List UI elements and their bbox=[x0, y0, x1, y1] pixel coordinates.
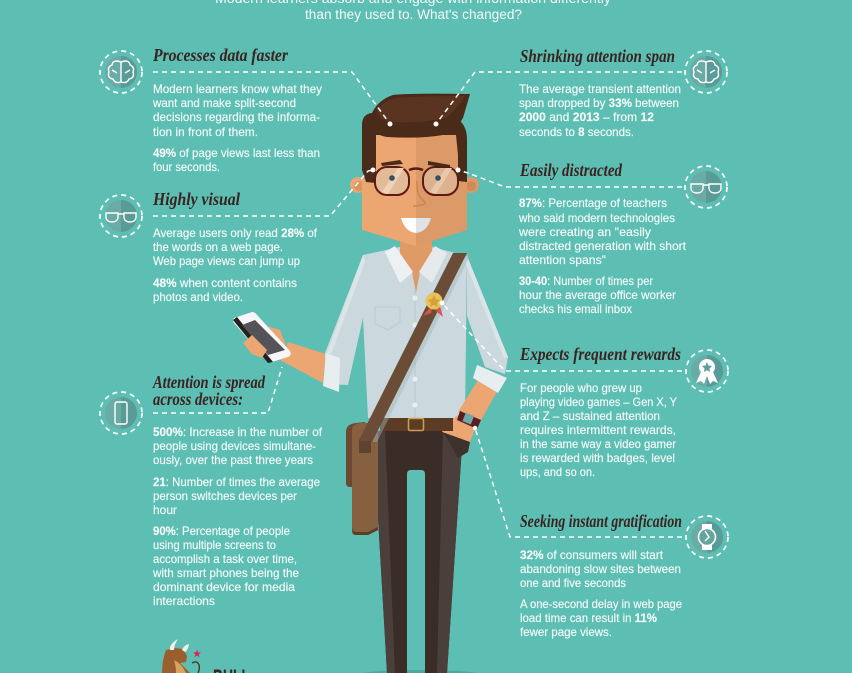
body text: 500%: Increase in the number of bbox=[153, 425, 323, 439]
body text: ups, and so on. bbox=[520, 465, 595, 479]
icon: watch bbox=[686, 516, 728, 558]
right forearm and hand bbox=[442, 380, 498, 458]
heading: Expects frequent rewards bbox=[519, 344, 681, 364]
body text bbox=[152, 82, 322, 174]
body text: 87%: Percentage of teachers bbox=[519, 196, 667, 210]
body text: span dropped by 33% between bbox=[519, 96, 679, 110]
body text: 49% of page views last less than bbox=[153, 146, 320, 160]
left arm holding phone bbox=[280, 342, 326, 383]
body text: photos and video. bbox=[153, 290, 243, 304]
heading: Processes data faster bbox=[152, 45, 289, 65]
body text bbox=[519, 82, 681, 139]
body text: who said modern technologies bbox=[518, 211, 675, 225]
body text: 90%: Percentage of people bbox=[153, 524, 290, 538]
medal bbox=[423, 292, 443, 317]
body text: Average users only read 28% of bbox=[153, 226, 318, 240]
intro text: than they used to. What's changed? bbox=[305, 7, 522, 22]
body text: 32% of consumers will start bbox=[520, 548, 664, 562]
body text: accomplish a task over time, bbox=[153, 552, 297, 566]
heading: Easily distracted bbox=[519, 160, 623, 180]
body text: The average transient attention bbox=[519, 82, 681, 96]
body text: attention spans" bbox=[519, 253, 606, 267]
body text: one and five seconds bbox=[520, 576, 626, 590]
collar bbox=[385, 246, 447, 283]
panel: highly visual bbox=[152, 189, 318, 304]
body text: 21: Number of times the average bbox=[153, 475, 320, 489]
icon: award bbox=[686, 350, 728, 392]
body text: using multiple screens to bbox=[153, 538, 276, 552]
ears bbox=[350, 177, 479, 193]
logo: bull bbox=[162, 639, 250, 673]
icon: brain right bbox=[685, 51, 727, 93]
panel: processes data faster bbox=[152, 45, 322, 174]
body text bbox=[518, 196, 687, 316]
body text bbox=[520, 381, 677, 479]
body text: Modern learners know what they bbox=[153, 82, 322, 96]
trousers bbox=[373, 431, 463, 673]
body text: people using devices simultane- bbox=[153, 439, 316, 453]
glasses bbox=[375, 167, 458, 195]
heading: Highly visual bbox=[152, 189, 240, 209]
body text: A one-second delay in web page bbox=[520, 597, 682, 611]
hair bbox=[362, 94, 470, 183]
body text: decisions regarding the informa- bbox=[153, 110, 320, 124]
panel: attention across devices bbox=[152, 372, 323, 608]
heading: Seeking instant gratification bbox=[520, 511, 682, 531]
floor shadow bbox=[353, 670, 487, 673]
body text: ously, over the past three years bbox=[153, 453, 313, 467]
face bbox=[362, 130, 467, 246]
body text: dominant device for media bbox=[153, 580, 295, 594]
heading bbox=[152, 372, 266, 409]
icon: glasses left bbox=[100, 195, 142, 237]
body text: checks his email inbox bbox=[519, 302, 632, 316]
body text: load time can result in 11% bbox=[520, 611, 657, 625]
body text: is rewarded with badges, level bbox=[520, 451, 675, 465]
connector lines bbox=[153, 72, 682, 537]
heading: Shrinking attention span bbox=[520, 46, 675, 66]
panel: seeking instant gratification bbox=[520, 511, 682, 639]
icon: glasses right bbox=[685, 166, 727, 208]
cuffs bbox=[323, 353, 507, 393]
body text: seconds to 8 seconds. bbox=[519, 125, 634, 139]
body text: the words on a web page. bbox=[153, 240, 283, 254]
body text: playing video games – Gen X, Y bbox=[520, 395, 677, 409]
body text: hour bbox=[153, 503, 177, 517]
body text: want and make split-second bbox=[152, 96, 296, 110]
phone bbox=[233, 312, 291, 363]
body text: in the same way a video gamer bbox=[520, 437, 676, 451]
thumb behind phone bbox=[266, 326, 286, 345]
shoulder strap bbox=[372, 253, 470, 442]
smile bbox=[401, 218, 431, 233]
body text: 48% when content contains bbox=[153, 276, 297, 290]
body text: tion in front of them. bbox=[153, 125, 258, 139]
shoulder bag bbox=[346, 422, 378, 535]
body text: were creating an "easily bbox=[518, 225, 651, 239]
panel: easily distracted bbox=[518, 160, 687, 316]
body text bbox=[153, 226, 318, 304]
eyebrows bbox=[381, 160, 450, 168]
wristwatch bbox=[457, 411, 481, 430]
icon: brain left bbox=[100, 51, 142, 93]
body text: requires intermittent rewards, bbox=[520, 423, 676, 437]
body text: Web page views can jump up bbox=[153, 254, 300, 268]
body text: distracted generation with short bbox=[519, 239, 687, 253]
body text bbox=[520, 548, 682, 639]
body text: person switches devices per bbox=[153, 489, 297, 503]
icon: phone left bbox=[100, 392, 142, 434]
character bbox=[233, 94, 508, 673]
body text: 2000 and 2013 – from 12 bbox=[519, 110, 654, 124]
body text: For people who grew up bbox=[520, 381, 642, 395]
body text: four seconds. bbox=[153, 160, 220, 174]
body text: fewer page views. bbox=[520, 625, 612, 639]
intro text bbox=[215, 0, 611, 22]
body text: hour the average office worker bbox=[519, 288, 676, 302]
heading: Attention is spread bbox=[152, 372, 266, 392]
shirt bbox=[325, 247, 508, 418]
neck bbox=[400, 240, 432, 293]
body text: with smart phones being the bbox=[152, 566, 299, 580]
body text: interactions bbox=[153, 594, 215, 608]
heading: across devices: bbox=[153, 389, 243, 409]
panel: shrinking attention span bbox=[519, 46, 681, 139]
panel: expects frequent rewards bbox=[519, 344, 681, 479]
nose bbox=[413, 181, 426, 206]
body text bbox=[152, 425, 323, 608]
belt bbox=[380, 418, 453, 431]
body text: 30-40: Number of times per bbox=[519, 274, 653, 288]
left hand fingers bbox=[243, 335, 267, 358]
body text: abandoning slow sites between bbox=[520, 562, 681, 576]
body text: and Z – sustained attention bbox=[520, 409, 660, 423]
